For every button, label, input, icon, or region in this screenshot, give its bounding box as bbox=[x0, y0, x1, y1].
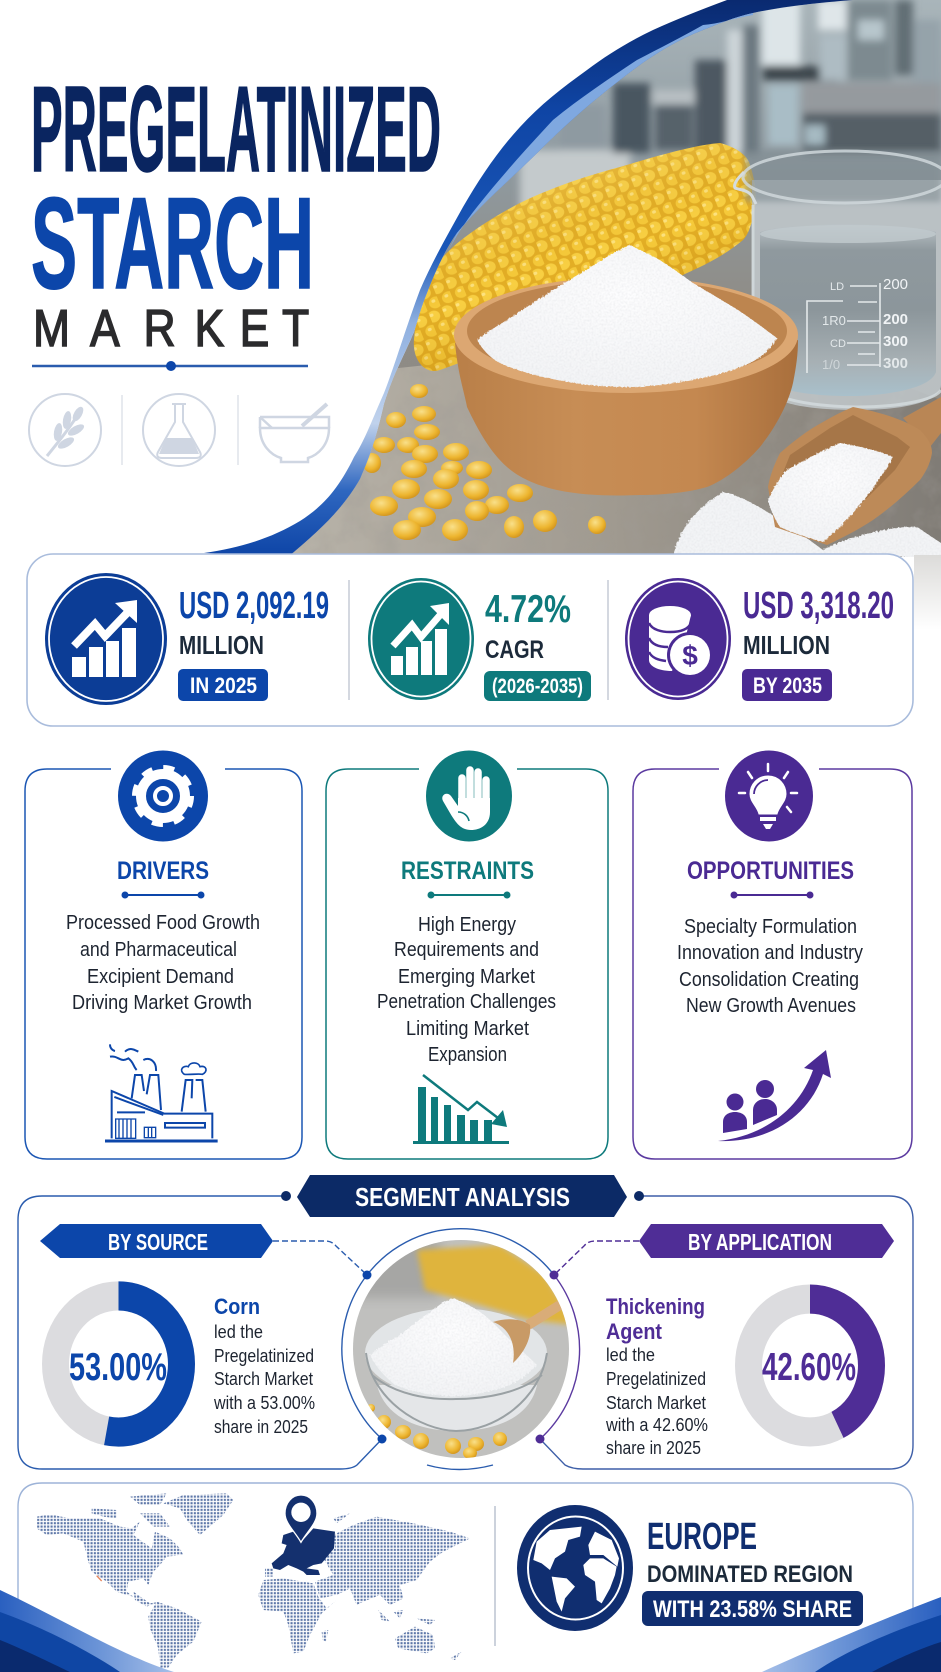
label: by source: BY SOURCE bbox=[108, 1229, 208, 1255]
text: corn description bbox=[213, 1294, 315, 1437]
icon: growth chart blue bbox=[45, 573, 167, 705]
title: K bbox=[195, 300, 224, 358]
text: Europe dominated region: WITH 23.58% SHARE bbox=[653, 1596, 852, 1623]
title: M bbox=[33, 300, 70, 358]
panel: restraints bbox=[326, 750, 608, 1159]
blurred factory background bbox=[520, 0, 941, 210]
heading: segment analysis bbox=[281, 1175, 644, 1217]
title divider bbox=[32, 361, 308, 371]
metric: market size 2025: MILLION bbox=[179, 630, 264, 660]
title: T bbox=[282, 300, 309, 358]
text: drivers description: Processed Food Growth bbox=[66, 912, 260, 934]
text: corn description: Starch Market bbox=[214, 1369, 313, 1389]
orange map mark bbox=[97, 1576, 102, 1581]
beaker of water: 1/0 bbox=[822, 357, 840, 372]
heading underline bbox=[428, 892, 510, 898]
location pin bbox=[285, 1495, 317, 1542]
donut chart: 42.60% thickening agent bbox=[748, 1299, 872, 1432]
corn cob bbox=[414, 143, 756, 371]
title: A bbox=[90, 300, 120, 358]
beaker of water: 200 bbox=[883, 276, 908, 293]
text: opportunities description: Specialty Formulation bbox=[684, 916, 857, 938]
fading powder at right edge bbox=[914, 555, 941, 630]
text: thickening agent description: Starch Market bbox=[606, 1393, 706, 1413]
text: corn description: led the bbox=[214, 1322, 263, 1342]
icon: people with rising arrow bbox=[718, 1050, 831, 1141]
icon: mortar and pestle bbox=[260, 404, 329, 462]
heading: drivers: DRIVERS bbox=[117, 857, 209, 885]
text: corn description: share in 2025 bbox=[214, 1417, 308, 1437]
beaker of water bbox=[735, 150, 941, 410]
metric: CAGR: (2026-2035) bbox=[492, 675, 583, 698]
text: drivers description: Driving Market Growth bbox=[72, 992, 252, 1014]
icon: flask bbox=[143, 394, 215, 466]
scattered starch on table bbox=[673, 492, 941, 557]
metric: market size 2025 bbox=[178, 585, 329, 701]
text: corn description: with a 53.00% bbox=[213, 1393, 315, 1413]
beaker of water: CD bbox=[830, 338, 846, 350]
label: by source bbox=[40, 1224, 273, 1258]
heading: opportunities: OPPORTUNITIES bbox=[687, 857, 854, 885]
donut chart: 53.00% corn bbox=[56, 1296, 182, 1432]
corn kernels bbox=[363, 384, 606, 541]
panel: drivers bbox=[25, 750, 302, 1159]
text: thickening agent description: led the bbox=[606, 1345, 655, 1365]
text: restraints description: Expansion bbox=[428, 1044, 507, 1066]
text: thickening agent description: Thickening bbox=[606, 1294, 705, 1319]
metric: CAGR: 4.72% bbox=[485, 588, 571, 631]
heading: segment analysis: SEGMENT ANALYSIS bbox=[355, 1182, 570, 1212]
icon: coins and dollar bbox=[625, 578, 731, 700]
icon: factory bbox=[105, 1044, 218, 1141]
metric: forecast 2035: BY 2035 bbox=[753, 673, 822, 698]
panel: key metrics bbox=[27, 554, 913, 726]
text: thickening agent description: Pregelatinized bbox=[606, 1369, 706, 1389]
title: E bbox=[240, 300, 269, 358]
dotted world map bbox=[37, 1493, 470, 1668]
heading underline bbox=[730, 892, 814, 898]
icons divider lines bbox=[122, 395, 238, 465]
icon: gear bbox=[118, 750, 208, 842]
icon: wheat bbox=[29, 394, 101, 466]
text: Europe dominated region: EUROPE bbox=[647, 1516, 757, 1558]
text: restraints description: High Energy bbox=[418, 914, 516, 936]
wooden scoop with starch bbox=[768, 397, 941, 545]
text: thickening agent description: with a 42.60% bbox=[605, 1415, 708, 1435]
text: restraints description: Emerging Market bbox=[398, 966, 535, 988]
text: restraints description: Requirements and bbox=[394, 939, 539, 961]
icon: globe bbox=[517, 1505, 633, 1631]
beaker of water: 300 bbox=[883, 355, 908, 372]
beaker of water: 300 bbox=[883, 333, 908, 350]
icon: raised hand bbox=[426, 750, 512, 842]
panel: regional leader bbox=[18, 1483, 913, 1668]
label: by application: BY APPLICATION bbox=[688, 1229, 832, 1255]
text: thickening agent description: share in 2025 bbox=[606, 1438, 701, 1458]
text: corn description: Pregelatinized bbox=[214, 1346, 314, 1366]
panel: opportunities bbox=[633, 750, 912, 1159]
metric: market size 2025: USD 2,092.19 bbox=[179, 585, 329, 627]
centre photo: starch in glass bowl bbox=[350, 1238, 575, 1460]
highlighted Europe bbox=[272, 1528, 335, 1575]
text: drivers description bbox=[66, 912, 260, 1014]
text: drivers description: and Pharmaceutical bbox=[80, 939, 237, 961]
text: thickening agent description bbox=[605, 1294, 708, 1458]
connectors to centre photo bbox=[273, 1229, 639, 1470]
text: restraints description: Limiting Market bbox=[406, 1018, 529, 1040]
heading: restraints: RESTRAINTS bbox=[401, 857, 534, 885]
metric: CAGR: CAGR bbox=[485, 636, 544, 664]
bottom swoosh left bbox=[0, 1590, 174, 1672]
text: Europe dominated region bbox=[642, 1516, 863, 1626]
metric: market size 2025: IN 2025 bbox=[190, 673, 257, 698]
hero photo: corn, starch bowl, beaker and scoop bbox=[280, 0, 941, 557]
text: restraints description bbox=[377, 914, 556, 1066]
table surface bbox=[292, 364, 941, 554]
icon: light bulb bbox=[725, 750, 813, 842]
title: R bbox=[144, 300, 176, 358]
donut chart: 53.00% corn: 53.00% bbox=[69, 1346, 167, 1389]
curved blue ribbon bbox=[204, 0, 853, 557]
text: drivers description: Excipient Demand bbox=[87, 966, 234, 988]
text: thickening agent description: Agent bbox=[606, 1319, 663, 1344]
beaker of water: LD bbox=[830, 281, 844, 293]
text: opportunities description: New Growth Avenues bbox=[686, 995, 856, 1017]
title: STARCH bbox=[31, 170, 314, 316]
text: corn description: Corn bbox=[214, 1294, 260, 1319]
text: restraints description: Penetration Challenges bbox=[377, 991, 556, 1013]
bottom swoosh right bbox=[762, 1597, 941, 1672]
metric: forecast 2035: MILLION bbox=[743, 630, 830, 660]
text: opportunities description bbox=[677, 916, 863, 1017]
icon: growth chart teal bbox=[368, 578, 474, 700]
title bbox=[31, 61, 441, 358]
beaker of water: 200 bbox=[883, 311, 908, 328]
panel: segment analysis bbox=[18, 1175, 913, 1470]
wooden bowl with starch bbox=[454, 245, 798, 495]
text: opportunities description: Consolidation Creating bbox=[679, 969, 859, 991]
icon: declining bar chart bbox=[413, 1075, 509, 1144]
donut chart: 42.60% thickening agent: 42.60% bbox=[762, 1346, 856, 1389]
metric: CAGR bbox=[484, 588, 591, 701]
heading underline bbox=[122, 892, 204, 898]
text: Europe dominated region: DOMINATED REGION bbox=[647, 1561, 853, 1588]
beaker of water: 1R0 bbox=[822, 313, 846, 328]
icon: coins and dollar: $ bbox=[682, 640, 698, 671]
metric: forecast 2035 bbox=[742, 585, 894, 701]
text: opportunities description: Innovation and Industry bbox=[677, 942, 863, 964]
label: by application bbox=[639, 1224, 894, 1258]
